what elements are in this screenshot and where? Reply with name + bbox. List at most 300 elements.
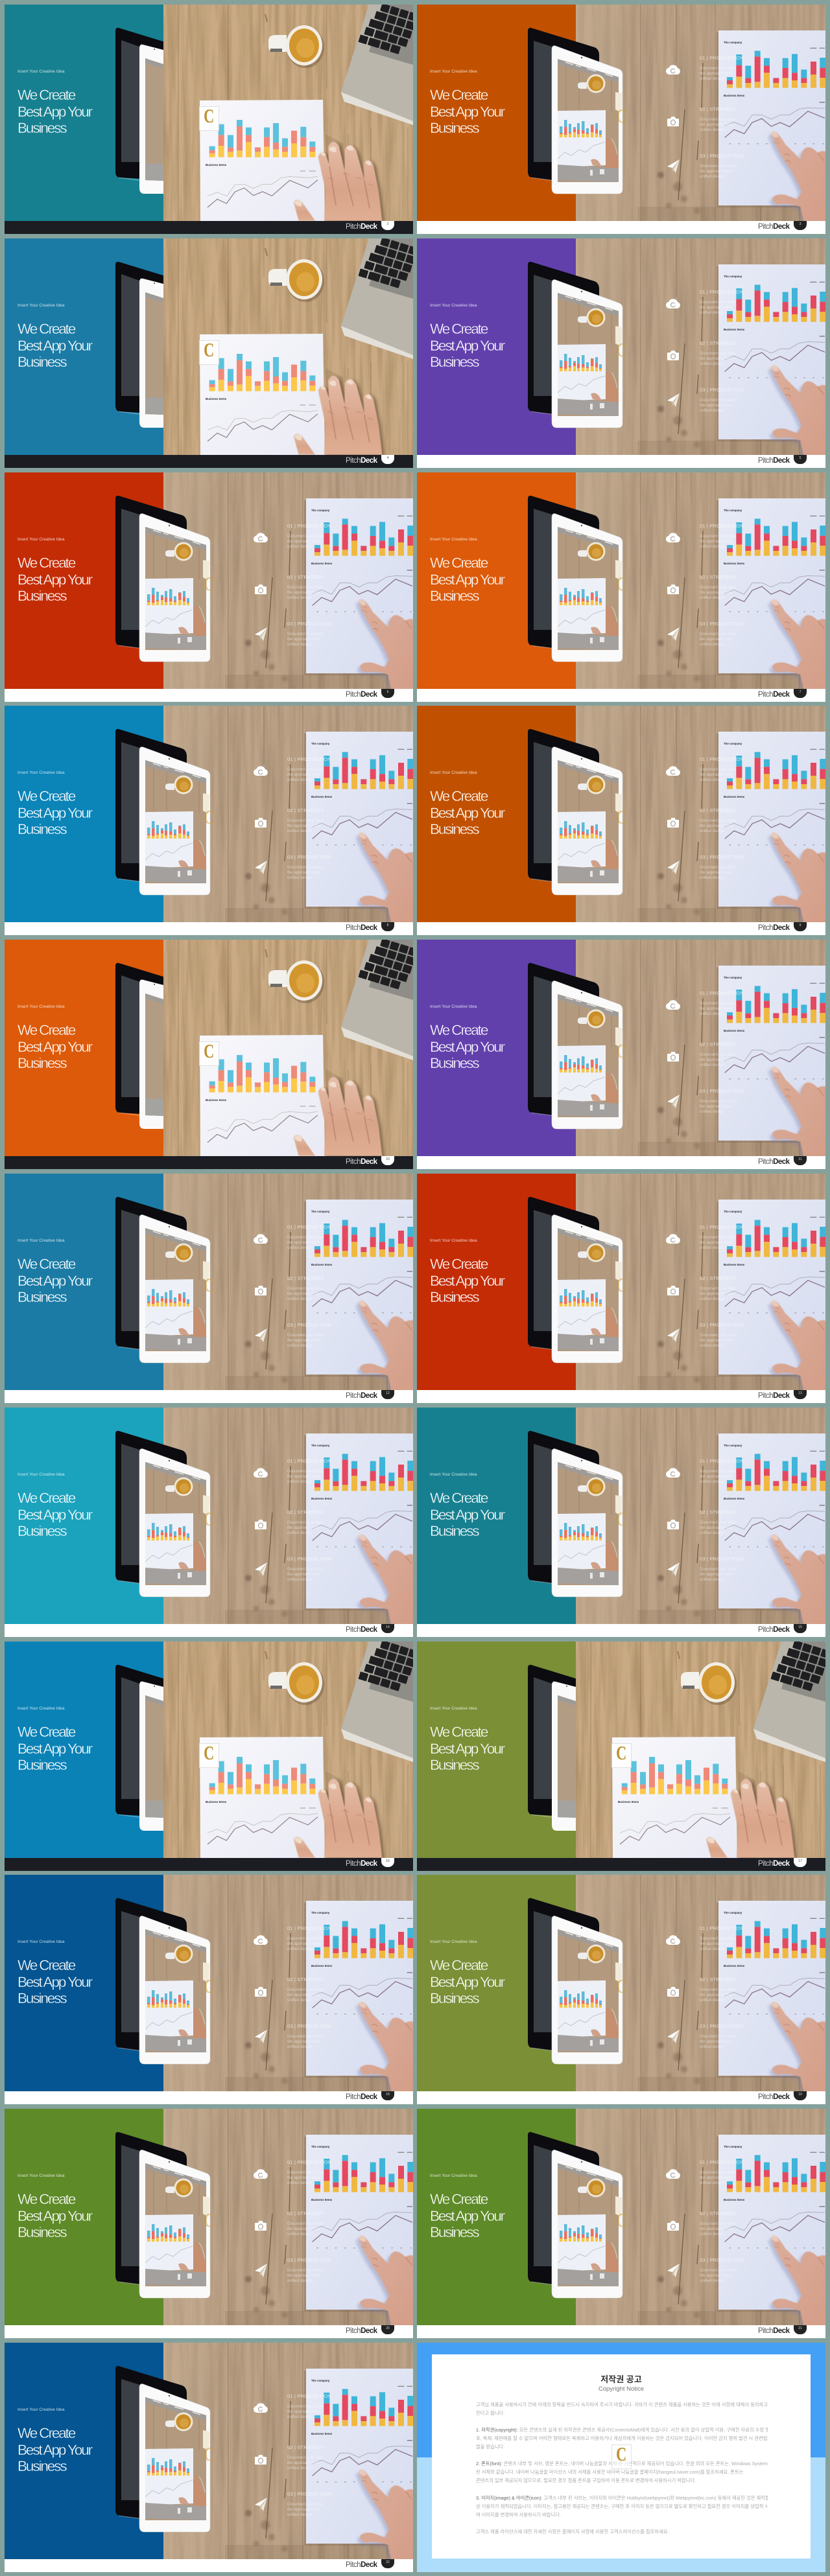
feature 01: unified design [287, 778, 312, 782]
feature 03: 03 | PRODUCTION [700, 1556, 744, 1562]
title: Best App Your [18, 1506, 91, 1523]
icon: cloud [665, 997, 681, 1013]
feature 01: the approach here [700, 1006, 732, 1011]
title: We Create [18, 2191, 75, 2207]
feature 02: 02 | STRATEGY [287, 2210, 324, 2216]
feature 01: unified design [287, 1246, 312, 1250]
feature 03: the approach here [287, 870, 320, 875]
feature 01: the approach here [700, 1240, 732, 1245]
colour panel [417, 940, 576, 1156]
icon: paper plane [665, 626, 681, 642]
kicker: Insert Your Creative Idea [18, 1004, 65, 1009]
feature 02 [665, 1977, 788, 2008]
footer bar [5, 2091, 413, 2104]
feature 03: unified design [700, 2045, 724, 2049]
feature 01 [253, 1926, 376, 1957]
watermark: C [204, 1039, 215, 1062]
feature 02: unified design [700, 2232, 724, 2236]
title: Business [18, 821, 66, 837]
colour panel [5, 5, 163, 221]
feature 03: Document your idea [700, 1099, 735, 1104]
footer bar [5, 1858, 413, 1871]
feature 02: Document your idea [700, 818, 735, 823]
icon: cloud [665, 763, 681, 779]
feature 01: Document your idea [700, 300, 735, 305]
title: Best App Your [430, 572, 504, 587]
feature 01: 01 | PRODUCTION [287, 1458, 331, 1464]
feature 02: Document your idea [700, 2222, 735, 2226]
feature 03: 03 | PRODUCTION [287, 2491, 331, 2497]
photo: wood with chart paper and hand [5, 1174, 413, 1403]
slide 4: blue panel, desk scene [5, 238, 413, 468]
icon: camera [667, 351, 679, 360]
title [18, 2425, 91, 2474]
chart title: The company [724, 1911, 742, 1914]
feature 02: unified design [287, 2466, 312, 2470]
feature 01 [253, 2160, 376, 2191]
title [18, 788, 91, 837]
feature 02: unified design [700, 362, 724, 366]
chart title: Business Items [724, 2198, 744, 2201]
title: Business [18, 1055, 66, 1071]
feature 01: unified design [700, 2181, 724, 2185]
feature 02: 02 | STRATEGY [287, 1275, 324, 1281]
watermark: C [204, 806, 215, 828]
chart title: The company [724, 1444, 742, 1447]
chart title: Business Items [724, 1029, 744, 1032]
feature 03: the approach here [700, 1572, 732, 1577]
slide 22: navy panel, tablet and features [5, 2343, 413, 2572]
feature 01: 01 | PRODUCTION [700, 289, 744, 295]
feature 03: the approach here [700, 2039, 732, 2044]
feature 03 [665, 2024, 788, 2055]
notice body text: 1. 저작권(copyright): 모든 콘텐츠의 실제 된 저작권은 콘텐츠 제공사(ContentsMall)에게 있습니다. 사전 동의 없이 상업적 이용, 구매한 자료의 수정 및 배 [476, 2427, 768, 2433]
footer bar: PitchDeck [346, 457, 377, 465]
title: Best App Your [430, 2207, 504, 2224]
watermark: C [204, 1507, 215, 1530]
footer bar [5, 1624, 413, 1637]
tablet mockup [5, 2109, 413, 2338]
feature 02: 02 | STRATEGY [700, 1275, 737, 1281]
icon: camera [253, 815, 268, 830]
tablet mockup clipped by panel [115, 27, 163, 194]
feature 03: 03 | PRODUCTION [700, 621, 744, 627]
icon: cloud [253, 2400, 268, 2416]
watermark: C [204, 1741, 215, 1764]
chart title: Business Items [724, 1497, 744, 1500]
background: light blue lower band [417, 2457, 825, 2572]
slide 9: burnt orange panel, tablet and features [417, 706, 825, 935]
feature 01: 01 | PRODUCTION [287, 523, 331, 529]
icon: paper plane [665, 2028, 681, 2044]
feature 01 [665, 2160, 788, 2191]
feature 03: Document your idea [287, 2502, 323, 2507]
photo: wood with chart paper and hand [5, 706, 413, 935]
title [430, 555, 504, 604]
footer bar: 10 [386, 1157, 390, 1161]
title: Best App Your [18, 1038, 91, 1055]
feature 03: unified design [287, 2045, 312, 2049]
footer bar: 8 [387, 923, 388, 927]
title: Business [430, 1990, 479, 2006]
feature 03 [665, 1323, 788, 1354]
feature 01: Document your idea [287, 1469, 323, 1474]
footer bar: PitchDeck [346, 2327, 377, 2335]
chart title: Business Items [206, 1098, 226, 1102]
feature 01: the approach here [287, 539, 320, 544]
feature 03: 03 | PRODUCTION [700, 1322, 744, 1328]
feature 01: 01 | PRODUCTION [700, 1458, 744, 1464]
footer bar: 19 [798, 2093, 802, 2096]
icon: cloud [666, 299, 680, 308]
title: We Create [430, 1256, 487, 1272]
title: Best App Your [430, 337, 504, 354]
feature 01: 01 | PRODUCTION [700, 1925, 744, 1931]
feature 01: Document your idea [700, 1936, 735, 1941]
slide 18: navy panel, tablet and features [5, 1875, 413, 2104]
notice body text: 벌을 받습니다. [476, 2444, 504, 2450]
title: Best App Your [18, 2442, 91, 2457]
feature 03: 03 | PRODUCTION [700, 854, 744, 860]
feature 02: 02 | STRATEGY [700, 807, 737, 813]
watermark: C [616, 338, 627, 361]
footer bar: 21 [798, 2327, 802, 2330]
feature 02 [665, 1042, 788, 1073]
watermark: C [616, 806, 627, 828]
feature 02: Document your idea [700, 1520, 735, 1525]
feature 02 [665, 1276, 788, 1307]
feature 01 [253, 524, 376, 555]
feature 03: Document your idea [287, 1567, 323, 1572]
title: Best App Your [18, 805, 91, 820]
colour panel [417, 1408, 576, 1624]
feature 01 [665, 1225, 788, 1256]
title: Best App Your [430, 1038, 504, 1055]
feature 02: the approach here [287, 2227, 320, 2231]
icon: camera [665, 1984, 681, 1999]
title: We Create [18, 87, 75, 103]
title: Business [18, 1757, 66, 1773]
feature 02: the approach here [287, 2461, 320, 2465]
chart title: Business Items [311, 1263, 332, 1266]
title: Best App Your [18, 1273, 91, 1288]
feature 02: the approach here [287, 1526, 320, 1530]
footer bar: 11 [798, 1157, 802, 1161]
chart title: The company [724, 742, 742, 745]
photo: wood with chart paper and hand [417, 2109, 825, 2338]
title: We Create [18, 1724, 75, 1740]
tablet mockup [417, 2109, 825, 2338]
footer bar [417, 689, 825, 702]
feature 01: Document your idea [287, 767, 323, 772]
feature 02: Document your idea [700, 1052, 735, 1057]
footer bar: 17 [798, 1859, 802, 1863]
photo: wood with chart paper and hand [417, 472, 825, 702]
icon: paper plane [665, 859, 681, 875]
chart title: Business Items [206, 163, 226, 167]
feature 03 [665, 2258, 788, 2289]
title [430, 1490, 504, 1540]
title: We Create [18, 1256, 75, 1272]
feature 03: unified design [700, 2279, 724, 2283]
chart title: Business Items [618, 1800, 639, 1804]
feature 02: Document your idea [700, 1988, 735, 1992]
feature 03: Document your idea [287, 865, 323, 870]
feature 03: Document your idea [287, 1333, 323, 1338]
feature 02 [665, 575, 788, 606]
feature 01: 01 | PRODUCTION [287, 2393, 331, 2399]
feature 02: unified design [700, 1531, 724, 1535]
feature 03: unified design [700, 408, 724, 413]
watermark [199, 1743, 219, 1768]
feature 03: the approach here [287, 2039, 320, 2044]
title [430, 1022, 504, 1072]
chart title: The company [311, 509, 329, 512]
feature 03: unified design [287, 1577, 312, 1582]
icon: cloud [665, 1465, 681, 1481]
white notice card [432, 2354, 811, 2559]
icon: camera [665, 1049, 681, 1064]
footer bar: 16 [386, 1859, 390, 1863]
feature 01 [253, 757, 376, 788]
title: Business [18, 354, 66, 370]
feature 02: unified design [287, 596, 312, 600]
footer bar: 22 [386, 2560, 390, 2564]
feature 03 [253, 2492, 376, 2523]
photo: desk with chart paper, coffee, laptop, hand [163, 5, 413, 221]
feature 03: the approach here [287, 2273, 320, 2278]
title [18, 1256, 91, 1305]
chart title: The company [724, 1210, 742, 1213]
feature 01: unified design [700, 1947, 724, 1951]
photo: wood with chart paper and hand [417, 1408, 825, 1637]
feature 01: unified design [287, 2415, 312, 2419]
feature 02 [253, 2445, 376, 2476]
title: Best App Your [18, 337, 91, 354]
chart title: The company [311, 2379, 329, 2382]
title: Business [430, 2224, 479, 2240]
title: Business [430, 120, 479, 136]
feature 03: the approach here [700, 1338, 732, 1343]
watermark: C [204, 104, 215, 127]
title: We Create [430, 788, 487, 804]
title: Best App Your [18, 1974, 91, 1990]
kicker: Insert Your Creative Idea [18, 537, 65, 542]
feature 01: unified design [700, 1246, 724, 1250]
feature 03: the approach here [700, 870, 732, 875]
tablet mockup clipped by panel [417, 1642, 576, 1858]
feature 03: Document your idea [700, 1567, 735, 1572]
title: Business [18, 2224, 66, 2240]
tablet mockup [417, 1875, 825, 2104]
slide 8: blue panel, tablet and features [5, 706, 413, 935]
feature 03: 03 | PRODUCTION [287, 2257, 331, 2263]
icon: paper plane [665, 1093, 681, 1109]
feature 01 [665, 524, 788, 555]
colour panel [417, 472, 576, 689]
feature 03: unified design [700, 174, 724, 179]
tablet mockup [417, 1174, 825, 1403]
icon: camera [665, 581, 681, 597]
footer bar [417, 1624, 825, 1637]
chart title: Business Items [724, 562, 744, 565]
title: We Create [430, 555, 487, 571]
notice title: 저작권 공고 [600, 2374, 642, 2384]
icon: paper plane [253, 2028, 268, 2044]
feature 02: the approach here [700, 122, 732, 127]
feature 03 [253, 2258, 376, 2289]
feature 02: 02 | STRATEGY [287, 574, 324, 580]
feature 01: 01 | PRODUCTION [700, 1224, 744, 1230]
slide 17: olive panel, desk scene [417, 1642, 825, 1871]
slide 12: blue panel, tablet and features [5, 1174, 413, 1403]
icon: paper plane [665, 1561, 681, 1577]
feature 01: the approach here [700, 1474, 732, 1479]
tablet mockup [417, 706, 825, 935]
title: We Create [430, 1490, 487, 1506]
watermark: C [204, 338, 215, 361]
feature 02 [253, 808, 376, 839]
icon: camera [665, 2218, 681, 2233]
icon: paper plane [253, 626, 268, 642]
icon: camera [665, 1516, 681, 1532]
feature 03: 03 | PRODUCTION [700, 153, 744, 159]
photo: wood with chart paper and hand [5, 2109, 413, 2338]
photo: wood with chart paper and hand [576, 238, 825, 455]
chart title: Business Items [311, 795, 332, 798]
kicker: Insert Your Creative Idea [18, 2174, 65, 2178]
footer bar [5, 1390, 413, 1403]
watermark [611, 1743, 632, 1768]
feature 01: the approach here [287, 2176, 320, 2180]
tablet mockup [5, 1408, 413, 1637]
feature 03: 03 | PRODUCTION [700, 2257, 744, 2263]
footer bar [417, 221, 825, 234]
feature 02: Document your idea [287, 2222, 323, 2226]
kicker: Insert Your Creative Idea [430, 771, 477, 775]
colour panel [417, 1642, 576, 1858]
slide 5: purple panel, tablet and features [417, 238, 825, 468]
feature 01: 01 | PRODUCTION [287, 756, 331, 762]
footer bar: PitchDeck [346, 1392, 377, 1400]
feature 03 [665, 621, 788, 653]
feature 02: unified design [287, 2232, 312, 2236]
feature 03: Document your idea [287, 2034, 323, 2039]
footer bar: 9 [800, 923, 801, 927]
chart title: The company [724, 509, 742, 512]
notice body text: 3. 이미지(image) & 아이콘(icon): 고객스 내부 된 서브는, 이미지와 아이콘은 Hobbyist(webpymnt)와 Webpymnt(kc.com) 등에서 제공한 것은 제작물 [476, 2495, 768, 2501]
chart title: Business Items [311, 2432, 332, 2435]
photo: wood with chart paper and hand [5, 2343, 413, 2572]
feature 02: unified design [700, 1998, 724, 2002]
feature 01: 01 | PRODUCTION [700, 990, 744, 996]
feature 01: the approach here [287, 772, 320, 777]
footer bar: PitchDeck [758, 1860, 790, 1868]
feature 01: Document your idea [287, 2170, 323, 2175]
footer bar [417, 1858, 825, 1871]
title: Best App Your [18, 104, 91, 119]
watermark: C [616, 2443, 627, 2465]
feature 02 [665, 2211, 788, 2242]
watermark: C [204, 1273, 215, 1296]
feature 03: the approach here [287, 2507, 320, 2512]
icon: camera [665, 815, 681, 830]
tablet mockup [417, 472, 825, 702]
chart title: Business Items [311, 1497, 332, 1500]
title [18, 87, 93, 136]
colour panel [417, 1174, 576, 1390]
icon: cloud [253, 1932, 268, 1948]
feature 02: the approach here [700, 1526, 732, 1530]
feature 02: unified design [700, 829, 724, 833]
title: We Create [430, 87, 487, 103]
feature 01: unified design [700, 1012, 724, 1016]
feature 03: Document your idea [700, 865, 735, 870]
title: Best App Your [430, 1506, 504, 1523]
slide 21: green panel, tablet and features [417, 2109, 825, 2338]
title: Best App Your [430, 104, 504, 119]
chart title: The company [311, 742, 329, 745]
notice body text: 고객스 제품 라이선스에 대한 자세한 사항은 홈페이지 사항에 사용한 고객스라이선스를 참조하세요. [476, 2529, 669, 2535]
footer bar: PitchDeck [346, 2561, 377, 2569]
feature 01 [666, 289, 744, 315]
kicker: Insert Your Creative Idea [18, 69, 65, 74]
feature 01 [253, 2394, 376, 2425]
feature 02 [253, 1977, 376, 2008]
watermark: C [616, 2209, 627, 2231]
footer bar: PitchDeck [758, 223, 790, 231]
feature 01: Document your idea [700, 534, 735, 539]
title [430, 1256, 504, 1305]
feature 02: unified design [287, 1531, 312, 1535]
feature 01 [253, 1225, 376, 1256]
icon: camera [253, 581, 268, 597]
feature 01: 01 | PRODUCTION [700, 2159, 744, 2165]
tablet mockup [5, 472, 413, 702]
kicker: Insert Your Creative Idea [430, 2174, 477, 2178]
slide 19: olive panel, tablet and features [417, 1875, 825, 2104]
footer bar [5, 455, 413, 468]
title: We Create [430, 1957, 487, 1973]
feature 02: 02 | STRATEGY [700, 574, 737, 580]
feature 01: 01 | PRODUCTION [287, 2159, 331, 2165]
kicker: Insert Your Creative Idea [18, 1238, 65, 1243]
feature 01: Document your idea [700, 66, 735, 71]
title [430, 788, 504, 837]
kicker: Insert Your Creative Idea [18, 2408, 65, 2412]
feature 03 [667, 153, 744, 179]
slide 10: orange panel, desk scene [5, 940, 413, 1169]
feature 02: 02 | STRATEGY [287, 807, 324, 813]
feature 02: the approach here [700, 2227, 732, 2231]
footer bar: PitchDeck [758, 1392, 790, 1400]
kicker: Insert Your Creative Idea [430, 1238, 477, 1243]
chart title: Business Items [311, 562, 332, 565]
feature 01: Document your idea [700, 2170, 735, 2175]
feature 01: the approach here [700, 71, 732, 76]
feature 01: 01 | PRODUCTION [700, 523, 744, 529]
chart title: The company [724, 41, 742, 44]
feature 01: Document your idea [287, 1235, 323, 1240]
watermark: C [204, 1975, 215, 1997]
watermark: C [616, 1039, 627, 1062]
feature 03 [665, 1557, 788, 1588]
feature 02: unified design [700, 1063, 724, 1067]
title: Best App Your [430, 1741, 504, 1756]
feature 02: the approach here [700, 590, 732, 595]
colour panel [5, 706, 163, 922]
colour panel [417, 5, 576, 221]
